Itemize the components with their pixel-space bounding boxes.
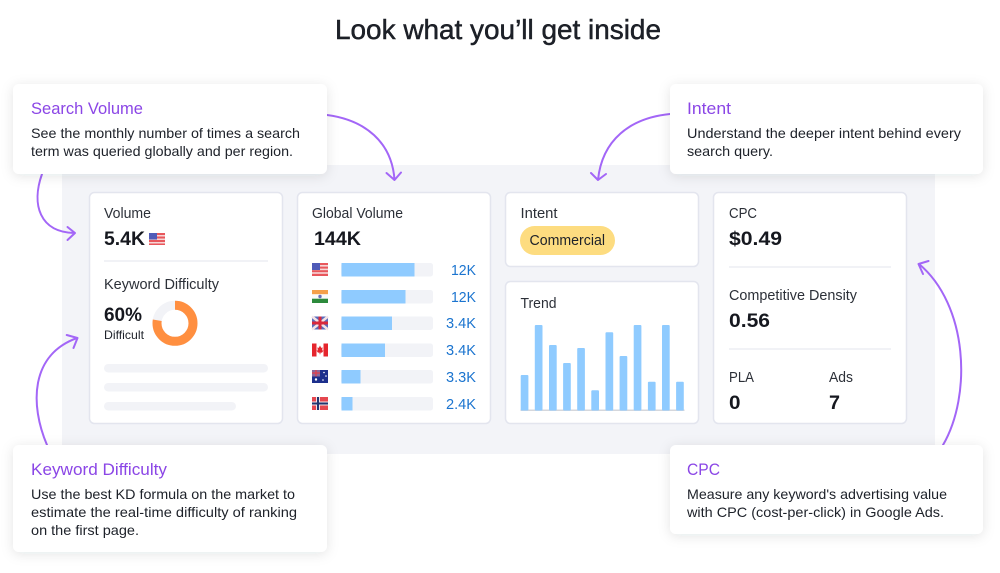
arrow: search volume to global volume card [327,115,401,180]
cpc label: CPC [729,206,757,222]
icon: Norway flag [312,397,328,410]
country values [446,263,476,413]
callout: keyword difficulty: on the first page. [31,522,139,538]
competitive density value: 0.56 [729,311,770,332]
callout heading: CPC [687,461,720,479]
icon: UK flag [312,316,328,330]
callout text: Understand the deeper intent behind every [687,125,961,141]
global volume label: Global Volume [312,206,403,222]
ads label: Ads [829,370,853,386]
icon: Canada flag [312,344,328,356]
volume value: 5.4K [104,229,145,250]
callout: intent [670,84,983,174]
commercial badge: Commercial [530,233,605,249]
bar chart: trend [520,325,684,411]
panel: volume and keyword difficulty [90,192,282,424]
difficulty value: 60% [104,305,142,326]
callout heading: Intent [687,100,731,118]
placeholder lines [104,364,268,410]
difficulty caption: Difficult [104,328,145,342]
callout heading: Search Volume [31,100,143,118]
dashboard background panel [62,165,935,454]
pla value: 0 [729,393,740,414]
keyword difficulty label: Keyword Difficulty [104,277,220,293]
callout text: Measure any keyword's advertising value [687,486,947,502]
icon: India flag [312,290,328,303]
arrow: cpc callout to cpc card [918,261,961,445]
commercial badge [520,226,615,255]
icon: US flag [312,263,328,276]
callout text: Use the best KD formula on the market to [31,486,295,502]
callout text: See the monthly number of times a search [31,125,300,141]
panel: cpc metrics [714,192,906,424]
callout: cpc [670,445,983,534]
callout: search volume: term was queried globally and per region. [31,143,293,159]
country values: 12K [451,263,476,279]
intent label: Intent [520,206,558,222]
icon: US flag [149,233,165,245]
competitive density label: Competitive Density [729,288,858,304]
donut chart [157,305,193,341]
bar chart: volume by country [341,263,433,410]
country values: 3.3K [446,370,476,386]
country values: 2.4K [446,397,476,413]
callout: keyword difficulty: estimate the real-time difficulty of ranking [31,504,297,520]
panel: intent [506,192,698,266]
volume label: Volume [104,206,151,222]
callout heading: Keyword Difficulty [31,461,168,479]
country values: 3.4K [446,343,476,359]
callout: search volume [13,84,327,174]
country values: 12K [451,290,476,306]
title: Look what you’ll get inside [335,14,661,45]
trend label: Trend [520,296,556,312]
pla label: PLA [729,370,754,386]
callout: intent: search query. [687,143,773,159]
ads value: 7 [829,393,840,414]
callout: keyword difficulty [13,445,327,552]
cpc value: $0.49 [729,229,782,250]
callout: cpc: with CPC (cost-per-click) in Google Ads. [686,504,944,520]
icon: Australia flag [312,370,328,383]
country values: 3.4K [446,316,476,332]
global volume value: 144K [314,229,361,250]
arrow: search volume to volume card [38,174,75,240]
panel: global volume [298,192,490,424]
arrow: intent callout to intent card [591,114,670,180]
arrow: keyword difficulty callout to difficulty [37,335,78,445]
panel: trend [506,282,698,424]
